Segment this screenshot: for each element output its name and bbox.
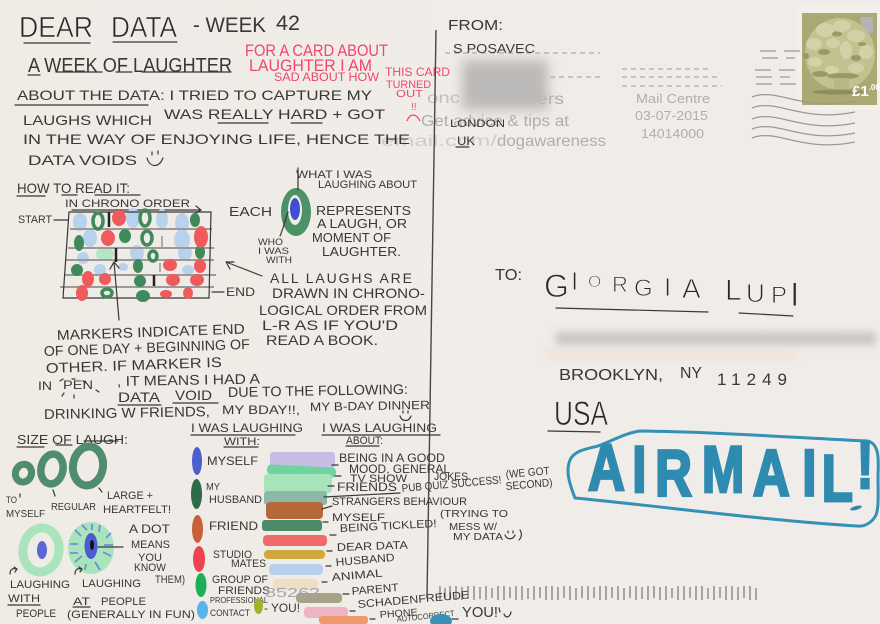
laugh glyph explanation: REPRESENTS [316,203,411,218]
swatch labels: FRIENDS [337,480,397,494]
size of laugh legend [6,432,171,520]
swatch labels: PHONE [379,607,418,621]
green marks [71,213,205,302]
postmark: printed slogan and mail centre: 14014000 [641,126,704,141]
red note: SAD ABOUT HOW [274,70,380,84]
vertical divider [427,30,436,598]
recipient name: G [544,268,569,304]
markers note with arrow: , IT MEANS I HAD A [117,370,261,389]
swatch labels: SCHADENFREUDE [357,589,470,611]
from address: LONDON [450,118,505,130]
about the data [15,87,410,168]
laughing with vs at people: (GENERALLY IN FUN) [67,609,195,621]
recipient name: G [634,275,653,302]
markers note with arrow: VOID [175,387,212,403]
swatch labels: (WE GOT [505,465,550,481]
chronological note with arrow: ALL LAUGHS ARE [270,270,412,286]
recipient name: A [682,273,701,304]
to address: USA [554,395,608,433]
icon: laughing at [68,522,114,574]
laugh glyph explanation: A LAUGH, OR [317,216,407,231]
markers note with arrow: DRINKING W FRIENDS, [44,403,210,422]
swatch labels: STRANGERS BEHAVIOUR [332,496,467,508]
recipient name: R [612,272,628,297]
about the data: ABOUT THE DATA: I TRIED TO CAPTURE MY [17,87,373,103]
markers note with arrow: MY BDAY!!, [222,403,300,417]
markers note with arrow: PEN [63,378,93,392]
postmark: printed slogan and mail centre: onc [427,90,460,107]
markers note with arrow: DATA [118,389,161,405]
markers note with arrow: OF ONE DAY + BEGINNING OF [44,336,250,359]
swatch labels: PARENT [351,582,399,598]
swatch labels: JOKES [434,471,468,483]
swatch labels: YOU! [462,604,498,621]
sample grid chart: START [18,214,52,226]
laughing with vs at people: WITH [8,593,40,605]
sample grid chart: END [226,285,255,299]
recipient name: I [571,266,578,296]
laugh glyph explanation: WHO [258,237,283,247]
about the data: WAS REALLY HARD + GOT [164,106,386,122]
legend: I was laughing with: FRIENDS [218,585,270,597]
size of laugh legend: REGULAR [51,502,96,513]
postmark: printed slogan and mail centre: Get advice & tips at [421,113,570,130]
red note [245,41,450,121]
laugh glyph explanation: LAUGHTER. [322,244,401,259]
icon: oak tree [803,17,875,94]
swatch labels: MY DATA [453,532,503,543]
title: - WEEK [193,14,266,37]
sample grid chart [18,198,255,302]
size of laugh legend: TO [6,495,17,505]
blurred address [462,60,548,110]
from address [448,17,548,148]
laughing with vs at people: KNOW [134,562,167,574]
size of laugh legend: MYSELF [6,509,45,520]
red note: THIS CARD [385,65,450,79]
title [19,12,300,44]
large ring [70,445,106,487]
legend: I was laughing with: GROUP OF [212,574,268,586]
red marks [76,210,208,301]
legend: I was laughing about: ABOUT: [346,435,383,447]
barcode [440,586,756,600]
title: 42 [276,12,300,35]
to address: NY [680,365,702,382]
postmark: printed slogan and mail centre: 03-07-2015 [635,108,708,123]
laughing with vs at people [8,522,195,621]
swatch labels: AUTOCORRECT [396,609,455,624]
legend: I was laughing with: MY [206,482,220,493]
red note: FOR A CARD ABOUT [245,41,388,60]
legend: I was laughing with: - YOU! [264,601,300,615]
chronological note with arrow: DRAWN IN CHRONO- [272,285,425,301]
icon: smile [147,151,163,166]
chronological note with arrow: L-R AS IF YOU'D [262,317,398,333]
red note: LAUGHTER I AM [249,56,372,75]
swatch labels: MYSELF [332,512,385,524]
swatch labels [331,451,553,624]
postmark: printed slogan and mail centre: email.com/ [381,133,498,150]
recipient name: I [790,276,799,314]
colour swatches [262,452,368,624]
markers note with arrow: OTHER. IF MARKER IS [46,354,222,376]
cancellation wavy lines [752,51,855,145]
chronological note with arrow: READ A BOOK. [266,332,378,348]
swatch labels: BEING TICKLED! [340,518,437,535]
legend: I was laughing with: MYSELF [207,454,258,468]
markers note with arrow [38,262,430,422]
recipient name [544,266,799,314]
title: DEAR [19,12,93,44]
red note: OUT [396,89,423,100]
laugh glyph explanation: MOMENT OF [312,230,391,245]
about the data: DATA VOIDS [28,152,137,168]
recipient name: I [664,272,671,302]
recipient name: L [725,274,742,307]
stamp value: .00 [869,83,880,92]
to address: 11249 [717,370,787,389]
markers note with arrow: DUE TO THE FOLLOWING: [228,381,408,400]
postmark: printed slogan and mail centre: Mail Centre [636,91,710,106]
title: DATA [111,12,178,44]
how to read heading: HOW TO READ IT: [17,180,130,196]
legend: I was laughing with: I WAS LAUGHING [191,421,303,435]
mint mark [96,247,114,261]
legend: I was laughing about [262,421,553,624]
grid lines [60,229,216,287]
recipient name: P [771,282,787,309]
laugh glyph explanation [229,168,417,265]
laugh glyph explanation: I WAS [258,246,289,256]
to address: BROOKLYN, [559,367,663,384]
to address: TO: [495,267,522,284]
from address: FROM: [448,17,503,34]
monarch silhouette [860,17,873,33]
stamp value: £1 [852,83,869,100]
size of laugh legend: SIZE OF LAUGH: [17,432,128,447]
swatch labels: MESS W/ [449,522,497,533]
to address [495,266,876,433]
subtitle: A WEEK OF LAUGHTER [28,55,232,77]
size of laugh legend: LARGE + [107,490,153,502]
recipient name: U [746,278,765,308]
sample grid chart: IN CHRONO ORDER [65,198,190,210]
swatch labels: MOOD, GENERAL [349,462,450,476]
chronological note with arrow [226,262,427,348]
swatch labels: (TRYING TO [440,509,508,520]
legend: I was laughing with: PROFESSIONAL [210,596,269,605]
from address: S POSAVEC [453,41,535,56]
regular ring [39,452,65,486]
legend: I was laughing with: STUDIO [213,549,252,561]
stamp [797,6,880,110]
airmail stamp: AIRMAIL! [588,430,874,516]
laugh glyph explanation: WHAT I WAS [296,169,372,181]
markers note with arrow: MY B-DAY DINNER [310,398,430,414]
recipient name: O [588,272,601,291]
legend: I was laughing with: FRIEND [209,519,258,533]
red note: !! [411,102,417,113]
laughing with vs at people: PEOPLE [16,608,56,620]
icon: laugh glyph [280,168,311,236]
legend: I was laughing with [191,421,303,619]
size of laugh legend: HEARTFELT! [103,504,171,516]
swatch labels: DEAR DATA [337,540,409,554]
blurred street address [545,332,876,358]
legend: I was laughing with: MATES [231,558,266,570]
legend: I was laughing with: CONTACT [210,608,250,618]
legend: I was laughing with: HUSBAND [209,494,262,506]
laughing with vs at people: PEOPLE [101,596,146,608]
laughing with vs at people: THEM) [155,574,185,586]
swatch labels: HUSBAND [335,552,395,569]
red note: TURNED [386,79,431,91]
laugh glyph explanation: EACH [229,204,272,219]
markers note with arrow: MARKERS INDICATE END [57,320,245,343]
from address: UK [457,134,475,148]
legend: I was laughing with: WITH: [224,436,260,448]
about the data: IN THE WAY OF ENJOYING LIFE, HENCE THE [23,131,410,147]
chronological note with arrow: LOGICAL ORDER FROM [259,302,427,318]
about the data: LAUGHS WHICH [23,112,152,128]
laughing with vs at people: LAUGHING [82,578,141,590]
postmark: printed slogan and mail centre: ers [537,91,564,108]
laugh glyph explanation: WITH [266,255,292,265]
icon: laughing with [20,526,62,574]
legend: I was laughing about: I WAS LAUGHING [322,421,437,435]
swatch labels: ANIMAL [331,568,383,584]
laughing with vs at people: LAUGHING [10,579,70,591]
postmark: printed slogan and mail centre [381,53,722,150]
postmark: printed slogan and mail centre: dogawareness [497,133,606,150]
postmark code: 85262 [265,585,320,600]
swatch labels: BEING IN A GOOD [339,451,445,465]
swatch labels: SECOND) [505,477,553,493]
swatch labels: PUB QUIZ SUCCESS! [401,474,502,495]
laughing with vs at people: MEANS [131,539,170,551]
small ring [13,462,34,484]
swatch labels: TV SHOW [350,473,408,485]
light-blue marks [73,208,194,276]
laugh glyph explanation: LAUGHING ABOUT [318,179,417,191]
laughing with vs at people: AT [73,596,90,608]
laughing with vs at people: A DOT [129,522,171,536]
laughing with vs at people: YOU [138,552,162,564]
day markers [109,212,154,286]
markers note with arrow: IN [38,379,52,393]
